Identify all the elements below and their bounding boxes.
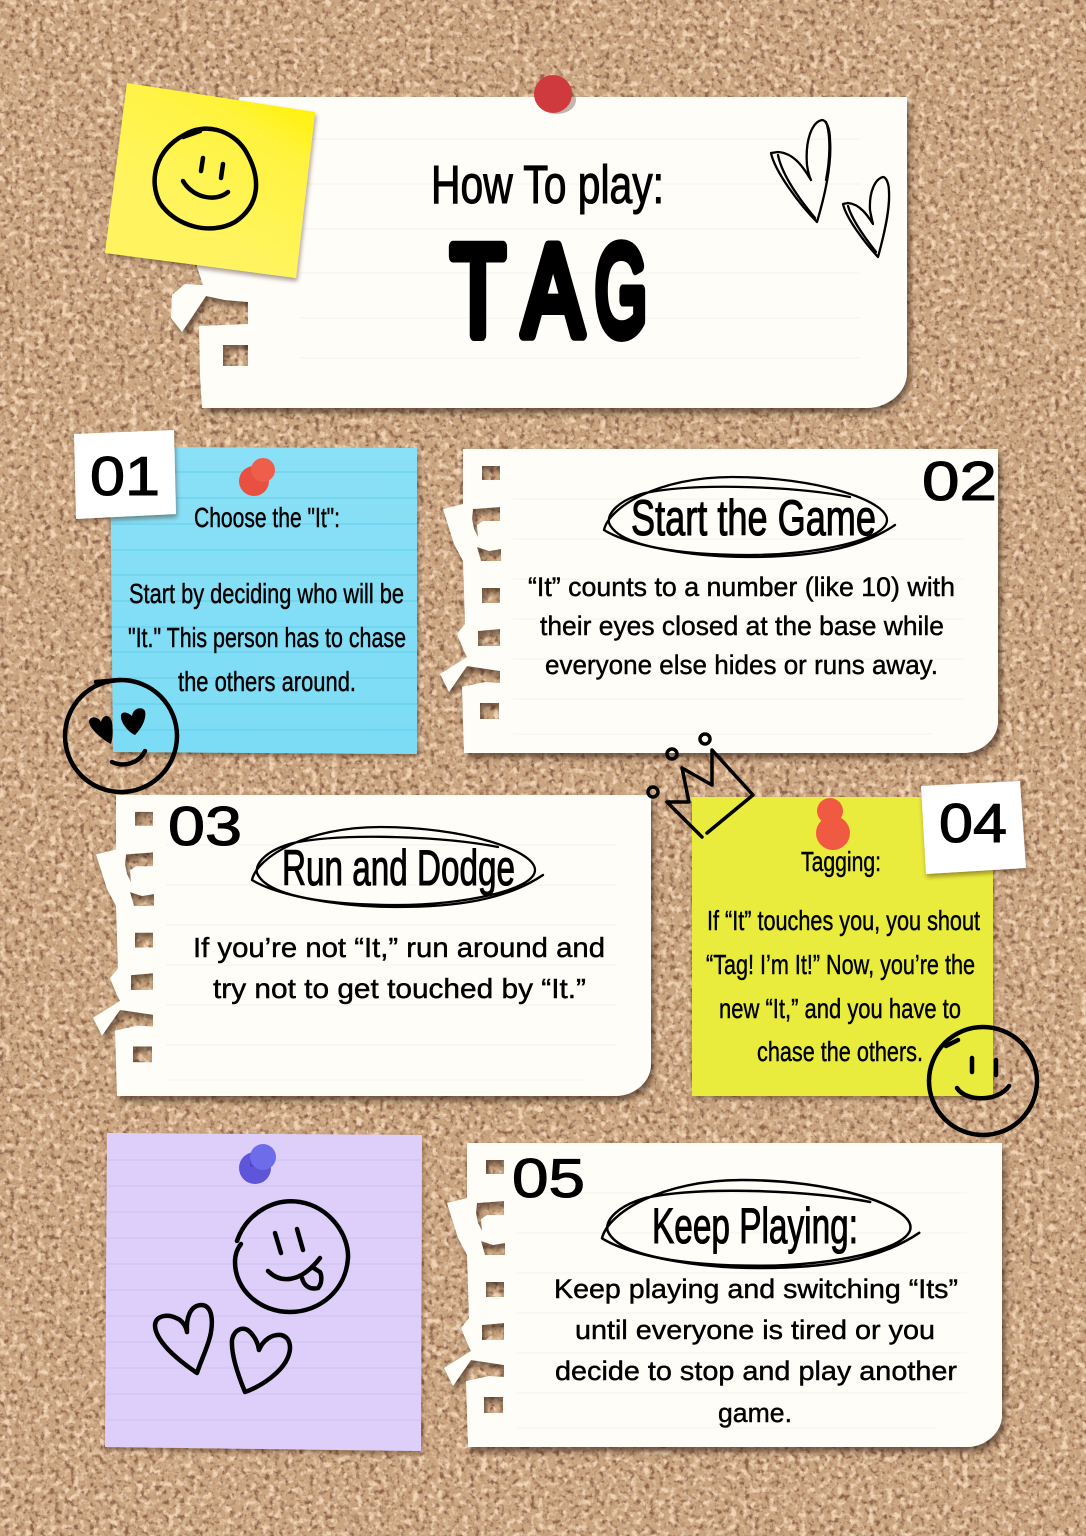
text: step 02 (528, 572, 955, 680)
panel: step 05 paper (444, 1143, 1002, 1447)
panel: title paper (171, 97, 907, 408)
heading with scribbled oval: Run and Dodge (282, 840, 515, 896)
text: step 02: their eyes closed at the base while (540, 611, 944, 641)
label: number 02: 02 (922, 450, 997, 512)
heading: how to play: How To play: (431, 155, 664, 215)
heading: TAG: T (451, 220, 505, 363)
text: step 05: game. (718, 1398, 792, 1428)
text: step 01: Start by deciding who will be (129, 578, 404, 609)
panel: step 03 paper (93, 795, 651, 1096)
heading with scribbled oval: Start the Game (631, 490, 876, 546)
panel: step 02 paper (440, 449, 998, 753)
label: number 03: 03 (168, 795, 242, 857)
text: step 01: Choose the "It": (194, 502, 340, 533)
heading: TAG (451, 220, 647, 363)
label: number 04: 04 (939, 792, 1007, 854)
panel: step 01 blue note (65, 430, 417, 792)
label: number 05: 05 (512, 1147, 585, 1209)
pin: red round pin (534, 75, 576, 114)
icon: heart-eyes smiley (65, 680, 177, 792)
text: step 05 (554, 1274, 958, 1428)
text: step 04: “Tag! I’m It!” Now, you’re the (706, 949, 975, 980)
label: number 04 (921, 781, 1026, 874)
text: step 05: Keep playing and switching “Its” (554, 1274, 958, 1304)
text: step 02: everyone else hides or runs away. (545, 650, 938, 680)
icon: smiley (155, 129, 256, 228)
text: step 03: try not to get touched by “It.” (213, 973, 586, 1004)
heading: TAG: A (523, 220, 583, 363)
heading with scribbled oval (602, 1180, 919, 1268)
icon: right heart (232, 1329, 290, 1392)
label: number 01 (74, 430, 176, 519)
panel: step 04 yellow note (692, 781, 1037, 1135)
sticky note: yellow with smiley (105, 83, 315, 278)
text: step 05: until everyone is tired or you (575, 1315, 935, 1345)
text: step 03 (193, 932, 605, 1004)
text: step 01 (128, 502, 406, 697)
icon: crown doodle (648, 734, 753, 837)
text: step 04: new “It,” and you have to (719, 993, 961, 1024)
text: step 02: “It” counts to a number (like 10) with (528, 572, 955, 602)
text: step 05: decide to stop and play another (555, 1356, 957, 1386)
panel: purple note with doodles (105, 1133, 422, 1451)
icon: large hand-drawn heart (771, 120, 830, 222)
pin: red (239, 458, 275, 496)
label: number 01: 01 (90, 445, 160, 507)
icon: left heart (155, 1305, 212, 1373)
text: step 04 (706, 846, 980, 1067)
text: step 04: Tagging: (801, 846, 881, 877)
pin: purple (239, 1144, 276, 1184)
pin: red-orange (816, 798, 850, 850)
heading with scribbled oval (252, 827, 543, 907)
text: step 01: "It." This person has to chase (128, 622, 406, 653)
heading with scribbled oval (604, 477, 895, 557)
heading with scribbled oval: Keep Playing: (652, 1198, 858, 1254)
text: step 04: If “It” touches you, you shout (707, 905, 980, 936)
icon: small hand-drawn heart (843, 177, 889, 257)
icon: smiley (929, 1027, 1037, 1135)
text: step 03: If you’re not “It,” run around and (193, 932, 605, 963)
text: step 01: the others around. (178, 666, 356, 697)
heading: TAG: G (595, 220, 647, 363)
icon: smiley sticking out tongue (235, 1201, 348, 1312)
text: step 04: chase the others. (757, 1036, 923, 1067)
